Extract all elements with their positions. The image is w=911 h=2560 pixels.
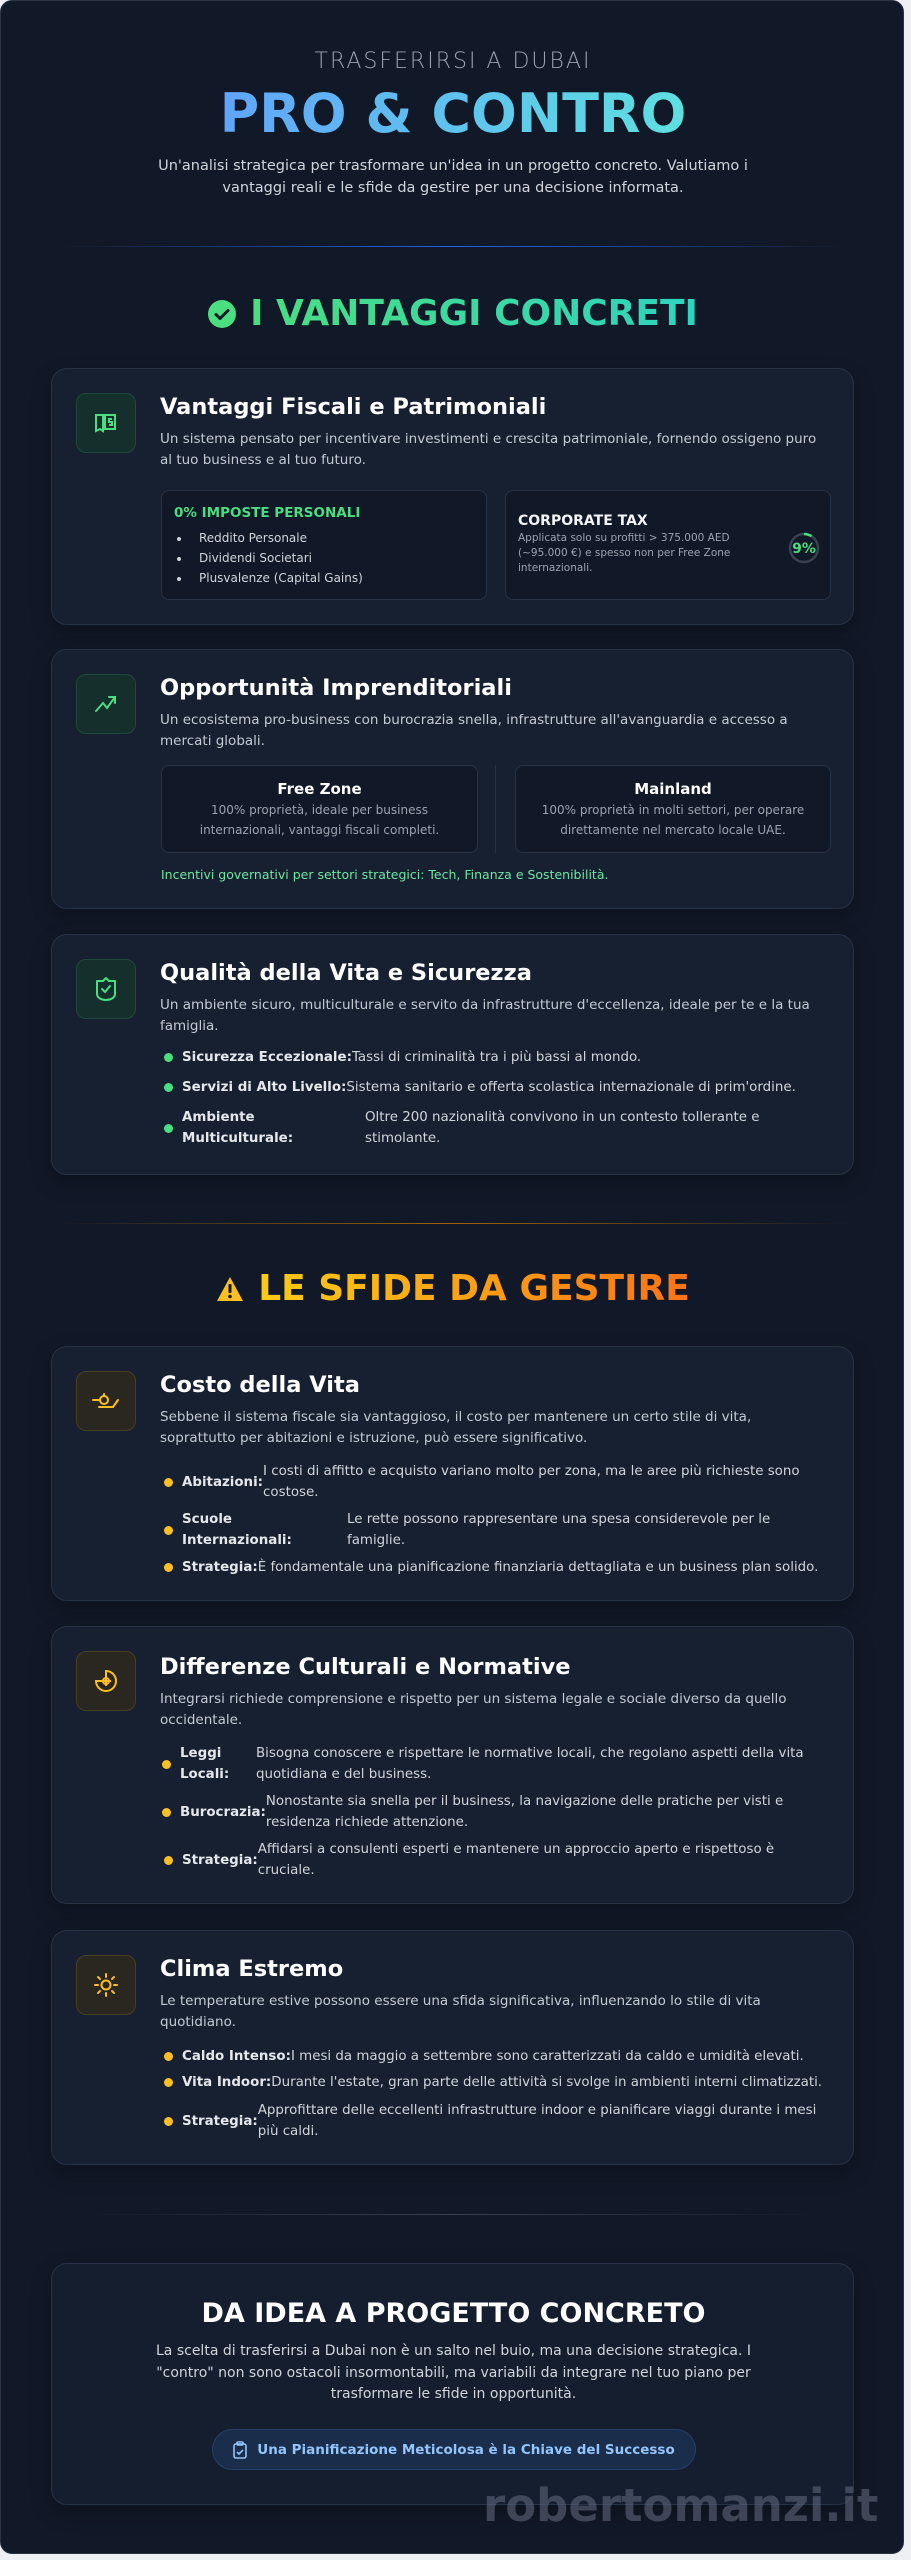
panel: costo della vita: Costo della Vita	[160, 1372, 360, 1398]
panel: qualita vita	[51, 934, 854, 1175]
panel: costo della vita: Strategia:	[182, 1560, 258, 1575]
kicker: TRASFERIRSI A DUBAI	[315, 49, 591, 74]
box: corporate tax: Applicata solo su profitti > 375.000 AED (~95.000 €) e spesso non per Free Zone internazionali.	[518, 532, 730, 574]
icon: sun	[76, 1955, 136, 2015]
panel: differenze culturali: Locali:	[180, 1767, 229, 1782]
subtitle: Un'analisi strategica per trasformare un'idea in un progetto concreto. Valutiamo i vantaggi reali e le sfide da gestire per una decisione informata.	[158, 158, 748, 196]
watermark: robertomanzi.it	[483, 2479, 878, 2532]
panel: costo della vita: Scuole	[182, 1512, 232, 1527]
panel: qualita vita: Multiculturale:	[182, 1131, 293, 1146]
panel: opportunita: Opportunità Imprenditoriali	[160, 675, 512, 701]
section heading: vantaggi: I VANTAGGI CONCRETI	[250, 293, 698, 334]
panel: costo della vita: Internazionali:	[182, 1533, 292, 1548]
panel: clima estremo: Durante l'estate, gran parte delle attività si svolge in ambienti interni climatizzati.	[271, 2075, 822, 2090]
panel: qualita vita: Servizi di Alto Livello:	[182, 1080, 346, 1095]
box: 0% imposte	[161, 490, 487, 600]
box: free zone: 100% proprietà, ideale per business internazionali, vantaggi fiscali completi.	[200, 803, 439, 837]
panel: clima estremo: Approfittare delle eccellenti infrastrutture indoor e pianificare viaggi durante i mesi più caldi.	[258, 2103, 816, 2139]
panel: differenze culturali: Leggi	[180, 1746, 221, 1761]
chart: 9% ring: 9%	[792, 541, 816, 557]
box: 0% imposte: Reddito Personale	[199, 531, 307, 545]
panel: differenze culturali: Affidarsi a consulenti esperti e mantenere un approccio aperto e rispettoso è cruciale.	[258, 1842, 774, 1878]
panel: qualita vita: Qualità della Vita e Sicurezza	[160, 960, 532, 986]
box: free zone	[161, 765, 478, 853]
icon: trend	[76, 674, 136, 734]
panel: differenze culturali: Integrarsi richiede comprensione e rispetto per un sistema legale e sociale diverso da quello occidentale.	[160, 1691, 787, 1728]
panel: opportunita	[51, 649, 854, 909]
panel: clima estremo	[51, 1930, 854, 2165]
box: mainland	[515, 765, 831, 853]
panel: costo della vita: I costi di affitto e acquisto variano molto per zona, ma le aree più richieste sono costose.	[263, 1464, 800, 1500]
box: 0% imposte: Plusvalenze (Capital Gains)	[199, 571, 363, 585]
heading: conclusione: DA IDEA A PROGETTO CONCRETO	[202, 2298, 705, 2329]
panel: costo della vita: Sebbene il sistema fiscale sia vantaggioso, il costo per mantenere un certo stile di vita, soprattutto per abitazioni e istruzione, può essere significativo.	[160, 1409, 751, 1446]
panel: differenze culturali: Nonostante sia snella per il business, la navigazione delle pratiche per visti e residenza richiede attenzione.	[266, 1794, 783, 1830]
text: conclusione: La scelta di trasferirsi a Dubai non è un salto nel buio, ma una decisione strategica. I "contro" non sono ostacoli insormontabili, ma variabili da integrare nel tuo piano per trasformare le sfide in opportunità.	[156, 2343, 751, 2402]
title: PRO & CONTRO	[220, 82, 686, 145]
box: free zone: Free Zone	[277, 780, 362, 798]
box: mainland: Mainland	[634, 780, 712, 798]
box: mainland: 100% proprietà in molti settori, per operare direttamente nel mercato locale UAE.	[542, 803, 804, 837]
panel: qualita vita: Oltre 200 nazionalità convivono in un contesto tollerante e stimolante.	[365, 1110, 759, 1146]
panel: clima estremo: I mesi da maggio a settembre sono caratterizzati da caldo e umidità elevati.	[291, 2049, 804, 2064]
panel: costo della vita: È fondamentale una pianificazione finanziaria dettagliata e un business plan solido.	[258, 1560, 818, 1575]
callout pill	[212, 2429, 696, 2470]
panel: qualita vita: Ambiente	[182, 1110, 255, 1125]
panel: vantaggi fiscali: Vantaggi Fiscali e Patrimoniali	[160, 394, 546, 420]
panel: differenze culturali	[51, 1626, 854, 1904]
panel: vantaggi fiscali	[51, 368, 854, 625]
note: Incentivi governativi per settori strategici: Tech, Finanza e Sostenibilità.	[161, 867, 608, 882]
panel: qualita vita: Sistema sanitario e offerta scolastica internazionale di prim'ordine.	[346, 1080, 796, 1095]
panel: clima estremo: Strategia:	[182, 2114, 258, 2128]
box: corporate tax: CORPORATE TAX	[518, 513, 648, 529]
panel: clima estremo: Clima Estremo	[160, 1956, 343, 1982]
callout pill: Una Pianificazione Meticolosa è la Chiave del Successo	[257, 2442, 675, 2458]
icon: compass	[76, 1651, 136, 1711]
panel: costo della vita	[51, 1346, 854, 1601]
panel: qualita vita: Sicurezza Eccezionale:	[182, 1050, 352, 1065]
box: 0% imposte: 0% IMPOSTE PERSONALI	[174, 505, 360, 521]
panel: qualita vita: Un ambiente sicuro, multiculturale e servito da infrastrutture d'eccellenza, ideale per te e la tua famiglia.	[160, 997, 810, 1034]
panel: vantaggi fiscali: Un sistema pensato per incentivare investimenti e crescita patrimoniale, fornendo ossigeno puro al tuo business e al tuo futuro.	[160, 431, 816, 468]
panel: differenze culturali: Bisogna conoscere e rispettare le normative locali, che regolano aspetti della vita quotidiana e del business.	[256, 1746, 804, 1782]
section heading: sfide: LE SFIDE DA GESTIRE	[258, 1268, 690, 1309]
panel: clima estremo: Caldo Intenso:	[182, 2049, 291, 2064]
panel: costo della vita: Le rette possono rappresentare una spesa considerevole per le famiglie.	[347, 1512, 770, 1548]
icon: money	[76, 393, 136, 453]
box: 0% imposte: Dividendi Societari	[199, 551, 312, 565]
panel: clima estremo: Le temperature estive possono essere una sfida significativa, influenzando lo stile di vita quotidiano.	[160, 1993, 761, 2030]
panel: costo della vita: Abitazioni:	[182, 1474, 263, 1490]
panel: qualita vita: Tassi di criminalità tra i più bassi al mondo.	[352, 1050, 641, 1065]
icon: hand coin	[76, 1371, 136, 1431]
panel: differenze culturali: Strategia:	[182, 1852, 258, 1868]
panel: opportunita: Un ecosistema pro-business con burocrazia snella, infrastrutture all'avanguardia e accesso a mercati globali.	[160, 712, 788, 749]
box: corporate tax	[505, 490, 831, 600]
icon: shield	[76, 959, 136, 1019]
panel: differenze culturali: Burocrazia:	[180, 1804, 266, 1820]
panel: clima estremo: Vita Indoor:	[182, 2075, 271, 2090]
chart: 9% ring	[788, 532, 820, 564]
panel: conclusione	[51, 2263, 854, 2505]
panel: differenze culturali: Differenze Culturali e Normative	[160, 1654, 570, 1680]
